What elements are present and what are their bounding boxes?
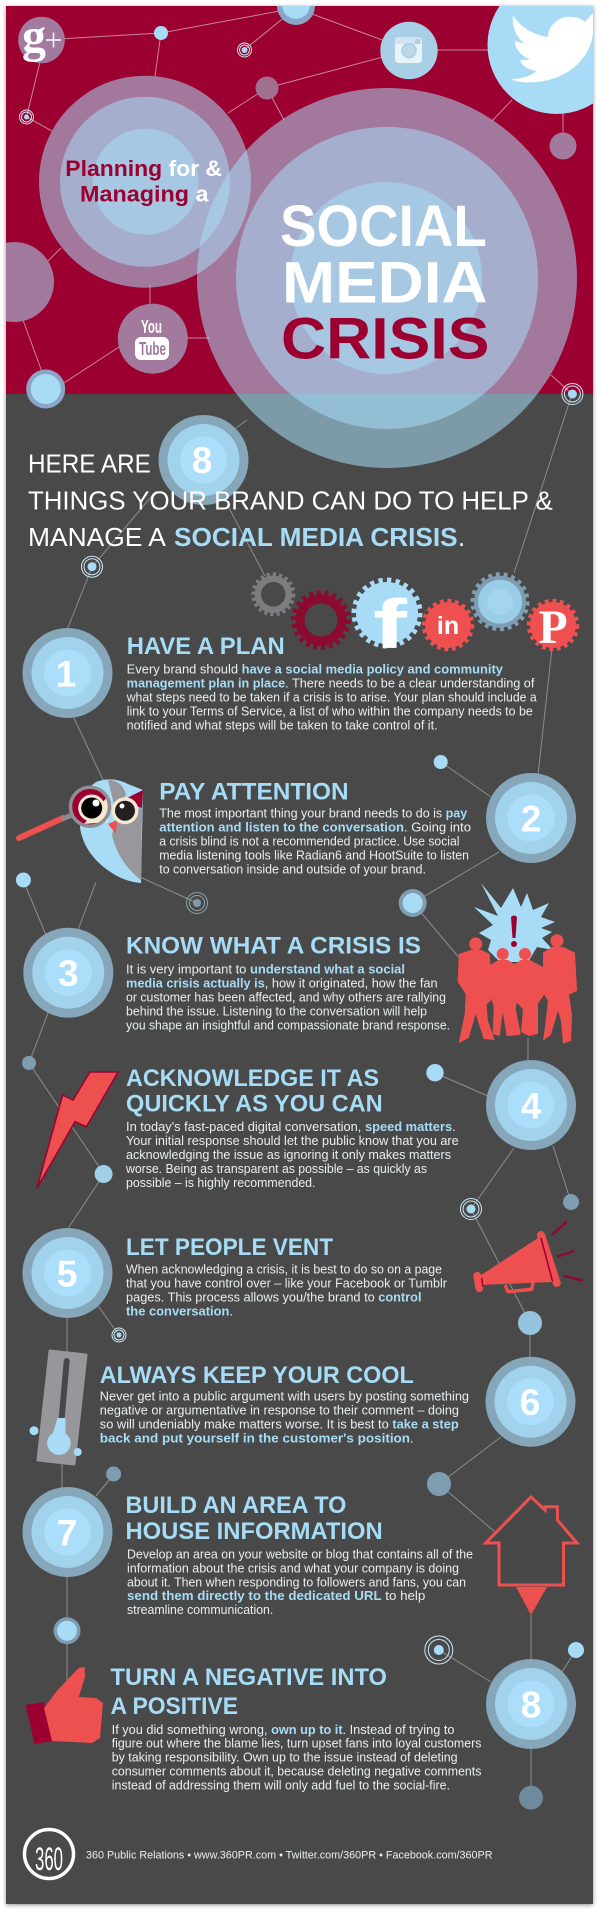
step 5: [22, 1222, 583, 1342]
node ring: [399, 889, 427, 917]
step 8: [26, 1636, 584, 1810]
body 5: the conversation .: [126, 1304, 233, 1318]
overlapping circle: title: [197, 88, 577, 468]
number 2 circle: [486, 773, 576, 863]
target: owl: [186, 892, 208, 914]
body 2: to conversation inside and outside of your brand.: [159, 862, 426, 876]
body 1: Every brand should have a social media policy and community: [127, 662, 503, 676]
small node lower: [95, 1165, 113, 1183]
icon: thumbs up: [26, 1667, 103, 1744]
intro heading: HERE ARE: [28, 451, 151, 479]
number 4 circle: [486, 1060, 576, 1150]
subtitle: planning for and managing: Managing a: [80, 182, 209, 207]
icon: google plus: g: [22, 10, 46, 63]
title: social media crisis: MEDIA: [282, 251, 488, 316]
small node left: [22, 1056, 36, 1070]
intro heading: .: [458, 524, 465, 552]
small node right: [518, 1311, 542, 1335]
body 3: you shape an insightful and compassionate brand response.: [126, 1018, 450, 1032]
small node left: [16, 872, 31, 888]
heading 6: ALWAYS KEEP YOUR COOL: [100, 1362, 414, 1389]
body 8: consumer comments about it, because deleting negative comments: [112, 1765, 481, 1779]
footer: [24, 1830, 493, 1878]
footer text: 360 Public Relations • www.360PR.com • Twitter.com/360PR • Facebook.com/360PR: [86, 1849, 493, 1861]
target: intro: [82, 556, 102, 577]
heading 8: [110, 1664, 387, 1720]
body 6: [100, 1390, 469, 1446]
step 2: [19, 755, 576, 914]
icon: lightning bolt: [37, 1072, 118, 1188]
number 1 circle: 1: [56, 654, 76, 694]
number 8 circle: 8: [521, 1684, 541, 1726]
heading 2: PAY ATTENTION: [159, 778, 349, 805]
number 5 circle: [22, 1228, 112, 1318]
number 7 circle: 7: [57, 1512, 77, 1554]
gear: facebook: [354, 580, 420, 663]
body 2: [159, 806, 471, 876]
heading 4: ACKNOWLEDGE IT AS: [126, 1065, 379, 1092]
gear: linkedin: in: [437, 612, 459, 640]
body 8: by taking responsibility. Own up to the issue instead of deleting: [112, 1751, 458, 1765]
intro heading: THINGS YOUR BRAND CAN DO TO HELP &: [28, 487, 553, 515]
header circle cluster: [0, 0, 600, 468]
small node: light blue: [154, 26, 168, 40]
circle: left edge: [6, 242, 54, 322]
icon: youtube: You: [141, 317, 162, 337]
small node: mauve: [256, 76, 278, 100]
number 8 circle: [486, 1659, 576, 1749]
intro: number 8 circle: [158, 415, 248, 505]
heading 7: [126, 1492, 383, 1545]
heading 7: HOUSE INFORMATION: [126, 1518, 383, 1545]
body 5: that you have control over – like your Facebook or Tumblr: [126, 1276, 447, 1290]
body 6: Never get into a public argument with users by posting something: [100, 1390, 469, 1404]
body 1: [126, 662, 537, 732]
target: right: [562, 384, 583, 404]
icon: instagram: [380, 22, 438, 79]
body 3: or customer has been affected, and why others are rallying: [126, 990, 446, 1004]
body 4: worse. Being as transparent as possible – as quickly as: [125, 1162, 427, 1176]
step 1: [22, 628, 537, 732]
small node top right: [568, 1642, 584, 1658]
heading 3: KNOW WHAT A CRISIS IS: [126, 932, 421, 959]
logo: 360: [24, 1830, 74, 1878]
body 7: streamline communication.: [127, 1603, 273, 1617]
body 6: so will undeniably make matters worse. It is best to take a step: [100, 1418, 459, 1432]
intro: number 8 circle: 8: [192, 440, 212, 481]
target: top: [238, 43, 252, 57]
body 8: figure out where the blame lies, turn upset fans into loyal customers: [112, 1737, 481, 1751]
small node: mauve right: [550, 132, 576, 160]
target: left: [20, 110, 34, 124]
heading 4: QUICKLY AS YOU CAN: [126, 1091, 383, 1118]
body 6: negative or argumentative in response to their comment – doing: [100, 1404, 459, 1418]
small node bottom: [519, 1786, 543, 1810]
heading 4: [126, 1065, 383, 1118]
icon: crowd of people: [458, 934, 577, 1044]
body 2: media listening tools like Radian6 and HootSuite to listen: [159, 848, 469, 862]
red header background: [6, 6, 593, 394]
title: social media crisis: CRISIS: [281, 306, 489, 371]
small node right: [563, 1194, 579, 1210]
icon: twitter: [488, 6, 593, 114]
number 6 circle: 6: [520, 1382, 540, 1423]
icon: youtube: [118, 304, 188, 374]
heading 5: LET PEOPLE VENT: [126, 1234, 333, 1261]
body 8: If you did something wrong, own up to it. Instead of trying to: [112, 1723, 455, 1737]
gear: linkedin: [424, 601, 472, 649]
number 4 circle: 4: [521, 1086, 542, 1126]
gear: pinterest: [529, 601, 577, 654]
number 2 circle: 2: [521, 798, 541, 840]
body 3: It is very important to understand what a social: [126, 962, 405, 976]
body 8: instead of addressing them will only add fuel to the social-fire.: [112, 1778, 450, 1792]
step 3: [16, 872, 577, 1044]
body 7: Develop an area on your website or blog that contains all of the: [127, 1547, 473, 1561]
intro heading: SOCIAL MEDIA CRISIS: [174, 524, 458, 552]
number 7 circle: [22, 1487, 112, 1577]
small node: [434, 755, 448, 769]
subtitle: planning for and managing: [65, 156, 222, 207]
body 2: a crisis blind is not a recommended practice. Use social: [159, 834, 460, 848]
number 3 circle: 3: [58, 953, 79, 994]
body 7: information about the crisis and what your company is doing: [127, 1561, 459, 1575]
body 7: send them directly to the dedicated URL to help: [127, 1589, 425, 1603]
body 1: management plan in place. There needs to be a clear understanding of: [127, 676, 535, 690]
body 6: back and put yourself in the customer's position .: [100, 1432, 414, 1446]
body 3: media crisis actually is, how it originated, how the fan: [126, 976, 438, 990]
body 7: [127, 1547, 473, 1617]
body 8: [112, 1723, 481, 1792]
body 4: In today's fast-paced digital conversation, speed matters.: [126, 1120, 456, 1134]
social gears: [254, 575, 577, 663]
small node: [427, 1472, 451, 1496]
heading 1: HAVE A PLAN: [127, 633, 285, 660]
title: social media crisis: [280, 194, 489, 371]
title: social media crisis: SOCIAL: [280, 194, 487, 259]
target: right: [425, 1636, 453, 1664]
intro heading: [28, 451, 553, 552]
icon: node bottom left: [26, 370, 65, 408]
body 1: notified and what steps will be taken to take control of it.: [127, 718, 438, 732]
gear: facebook: f: [373, 585, 408, 663]
body 4: Your initial response should let the public know that you are: [126, 1134, 459, 1148]
body 5: When acknowledging a crisis, it is best to do so on a page: [126, 1262, 442, 1276]
body 3: behind the issue. Listening to the conversation will help: [126, 1004, 427, 1018]
subtitle: planning for and managing: Planning for &: [65, 156, 222, 181]
number 1 circle: [22, 628, 112, 718]
body 4: acknowledging the issue as ignoring it only makes matters: [126, 1148, 451, 1162]
body 4: [125, 1120, 459, 1190]
body 5: [126, 1262, 447, 1318]
body 5: pages. This process allows you/the brand to control: [126, 1290, 422, 1304]
small circle: top node: [277, 6, 315, 25]
logo: 360: 360: [35, 1841, 63, 1877]
number 3 circle: [23, 928, 113, 1018]
body 1: what steps need to be taken if a crisis is to arise. Your plan should include a: [126, 690, 537, 704]
body 4: possible – is highly recommended.: [126, 1176, 316, 1190]
icon: youtube: Tube: [139, 339, 166, 359]
body 7: about it. Then when responding to followers and fans, you can: [127, 1575, 466, 1589]
body 2: attention and listen to the conversation . Going into: [159, 820, 471, 834]
gear: dark red: [294, 593, 348, 647]
step 7: [22, 1466, 577, 1644]
target: lower left: [112, 1328, 126, 1342]
small node top: [426, 1064, 444, 1081]
step 6: [30, 1351, 576, 1496]
icon: thermometer: [30, 1351, 86, 1464]
intro heading: MANAGE A: [28, 524, 166, 552]
icon: owl with magnifying glass: [19, 779, 143, 883]
icon: house: [486, 1497, 577, 1615]
gear: blue: [473, 575, 527, 629]
small node: [106, 1466, 121, 1482]
target: right: [460, 1198, 482, 1220]
step 4: [22, 1056, 579, 1220]
gear: pinterest: P: [538, 601, 568, 654]
heading 8: A POSITIVE: [110, 1693, 238, 1720]
gear: gray: [254, 575, 293, 614]
number 6 circle: [486, 1357, 576, 1447]
icon: crisis burst: [474, 883, 555, 962]
heading 8: TURN A NEGATIVE INTO: [110, 1664, 387, 1691]
body 1: link to your Terms of Service, a list of who within the company needs to be: [127, 704, 533, 718]
icon: google plus: [18, 16, 65, 64]
body 3: [126, 962, 450, 1032]
overlapping circle: subtitle: [39, 76, 251, 288]
icon: megaphone: [477, 1222, 583, 1292]
body 2: The most important thing your brand needs to do is pay: [159, 806, 467, 820]
node ring: [54, 1617, 80, 1644]
heading 7: BUILD AN AREA TO: [126, 1492, 346, 1519]
number 5 circle: 5: [57, 1254, 77, 1294]
